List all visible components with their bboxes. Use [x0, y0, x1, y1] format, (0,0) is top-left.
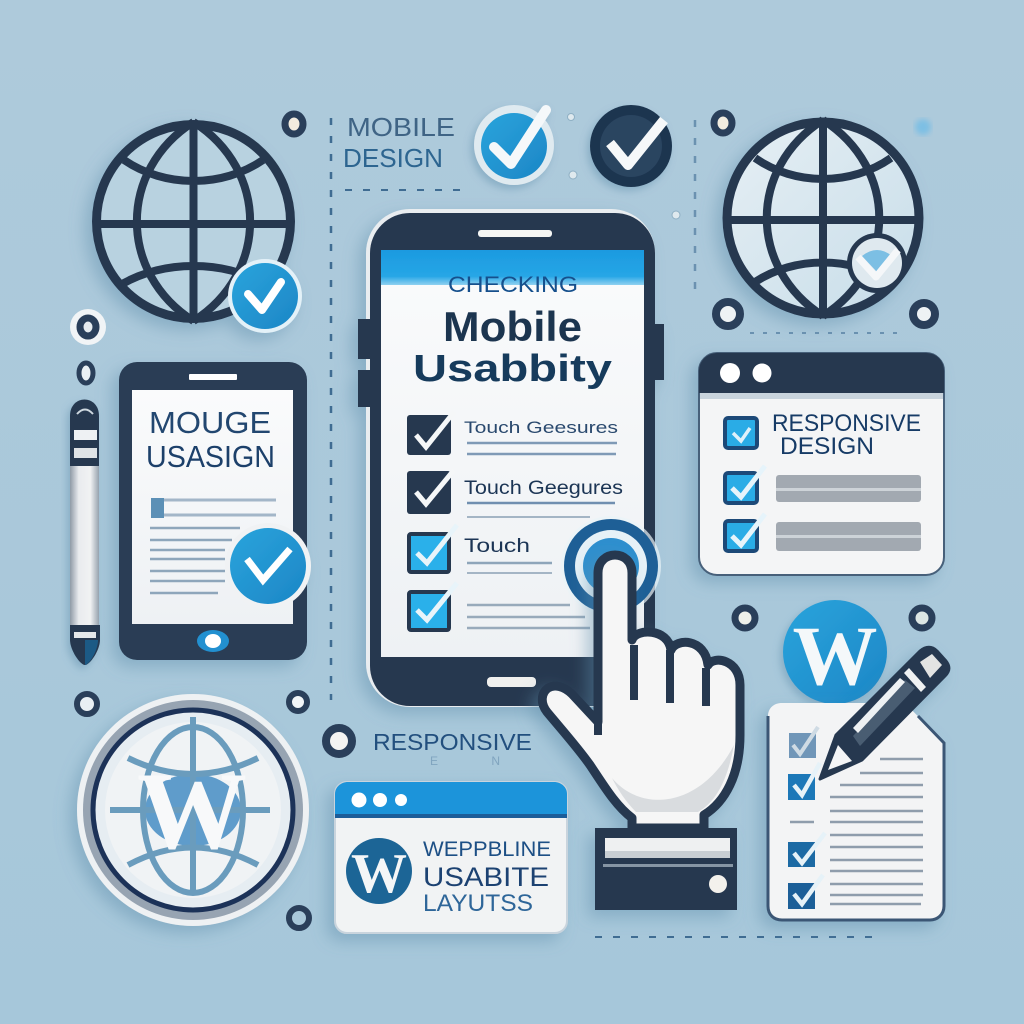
cuff [595, 828, 737, 910]
phone heading: MOUGE [149, 405, 271, 440]
phone: left mobile usage [119, 362, 311, 660]
phone heading: USASIGN [146, 439, 275, 474]
browser window: responsive design [699, 353, 944, 575]
main phone title: Mobile [443, 303, 582, 350]
small decorative dots: rings [70, 113, 935, 928]
check badge [225, 523, 311, 609]
wordpress logo: blue: W [792, 609, 878, 703]
checklist row 1: Touch Geesures [464, 418, 618, 437]
main phone [358, 209, 664, 707]
main phone title [413, 272, 612, 390]
check badge: left globe [228, 259, 302, 333]
wordpress globe badge [77, 694, 309, 926]
label: mobile design: DESIGN [343, 143, 443, 173]
checklist row 3: Touch [464, 536, 530, 557]
document checkboxes [788, 727, 825, 909]
window heading: DESIGN [780, 433, 874, 460]
check badge: dark top [590, 105, 672, 187]
label: responsive: E N [430, 754, 500, 768]
document lines [790, 759, 923, 904]
label: responsive: RESPONSIVE [373, 729, 532, 755]
label: mobile design: MOBILE [347, 112, 455, 142]
touch ripple [561, 516, 661, 616]
label: responsive [373, 729, 532, 768]
window heading: RESPONSIVE [772, 410, 921, 437]
browser text: LAYUTSS [423, 890, 533, 917]
browser window: wordpress usable layouts [335, 782, 567, 933]
pen [820, 647, 949, 779]
window checkboxes [725, 418, 765, 551]
globe icon: top right [727, 120, 920, 316]
window heading [772, 410, 921, 460]
label: mobile design [343, 112, 455, 173]
checklist row 4 [409, 583, 590, 630]
stylus [70, 400, 100, 665]
phone heading [146, 405, 275, 474]
wordpress logo: W [351, 843, 407, 905]
check badge: blue top [474, 105, 554, 185]
checklist row 1 [407, 412, 618, 455]
wordpress globe badge: W [137, 750, 247, 872]
checklist row 2 [407, 470, 623, 517]
text lines [150, 498, 276, 593]
browser text [423, 838, 551, 917]
browser text: WEPPBLINE [423, 838, 551, 861]
main phone title: CHECKING [448, 272, 578, 297]
globe icon: top left [96, 122, 302, 333]
document checklist [768, 647, 949, 920]
side buttons [358, 319, 664, 407]
window grey bars [776, 475, 921, 551]
checklist row 2: Touch Geegures [464, 478, 623, 499]
check badge: right globe [847, 233, 907, 293]
browser text: USABITE [423, 862, 549, 892]
checklist row 3 [409, 525, 552, 573]
main phone title: Usabbity [413, 348, 612, 390]
home button [197, 630, 229, 652]
pointing hand [542, 555, 740, 910]
